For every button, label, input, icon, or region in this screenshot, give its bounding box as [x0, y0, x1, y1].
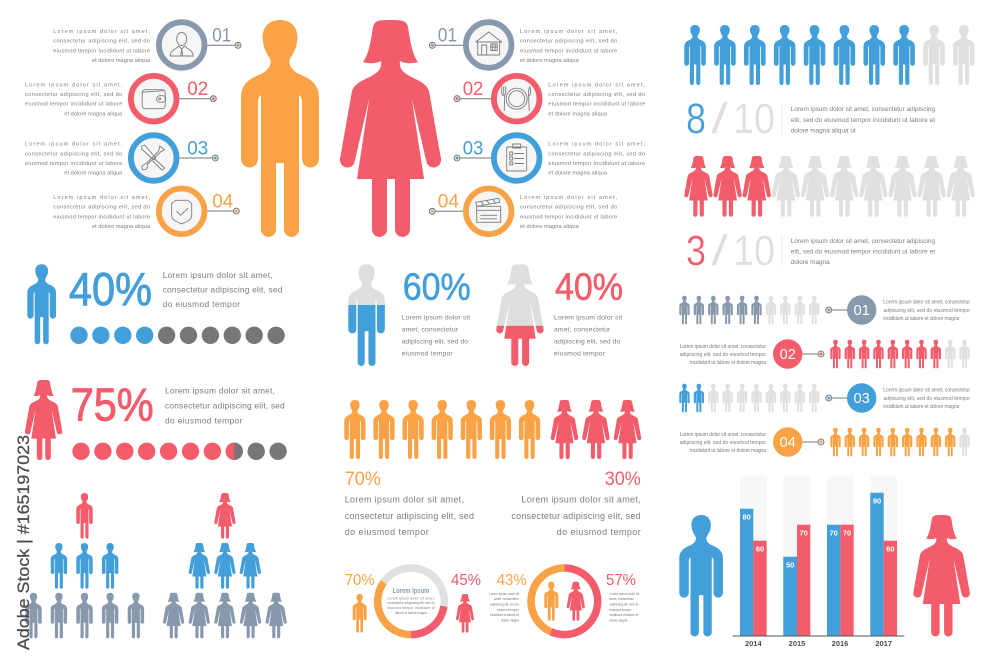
45% label: 45% [451, 572, 481, 589]
row 04: Lorem ipsum dolor sit amet, consectetur [680, 432, 766, 438]
left description: Lorem ipsum dolor sit [489, 592, 519, 596]
red woman [567, 582, 585, 621]
row of ten women [684, 156, 975, 217]
donut center text: Lorem Ipsum [393, 588, 429, 595]
panel: 75% woman [25, 379, 287, 460]
right description: do eiusmod tempor [557, 527, 641, 537]
left description: eiusmod tempor [497, 608, 520, 612]
item 04: clapperboard icon: consectetur adipiscing elit, sed do [520, 205, 617, 211]
description: adipiscing elit, sed do [554, 338, 621, 345]
item 01: house icon [429, 22, 618, 68]
partially filled man [348, 264, 385, 366]
item 02: plate icon [454, 76, 645, 121]
bars 2016: 70 [843, 528, 851, 538]
70% label: 70% [345, 468, 381, 490]
right description [609, 592, 639, 622]
panel: 8 of 10 men [684, 25, 975, 143]
left description: adipiscing elit, sed do [490, 602, 519, 606]
bars 2015: 70 [800, 528, 808, 538]
right description: consectetur adipiscing elit, sed [511, 511, 641, 521]
description text: elit, sed do eiusmod tempor incididunt ut labore et [791, 117, 935, 124]
fraction 8/10: / [711, 95, 728, 143]
row 01: adipiscing elit, sed do eiusmod tempor [883, 308, 970, 314]
item 02: wallet icon: Lorem ipsum dolor sit amet, [25, 82, 123, 88]
bars 2014 [740, 509, 767, 636]
red woman [456, 594, 474, 633]
description: Lorem ipsum dolor sit [554, 314, 622, 321]
57% label: 57% [606, 572, 636, 589]
item 03: clipboard icon [454, 135, 645, 181]
item 01: person icon: eiusmod tempor incididunt ut labore [53, 48, 150, 54]
partially filled woman [496, 264, 544, 366]
item 01: house icon: eiusmod tempor incididunt ut labore [520, 48, 617, 54]
fraction 3/10: 3 [686, 227, 706, 275]
item 02: wallet icon: 02 [187, 78, 208, 100]
donut center text: labore et dolore magna [395, 611, 427, 615]
item 03: tools icon: consectetur adipiscing elit, sed do [25, 151, 122, 157]
description: Lorem ipsum dolor sit amet, [165, 386, 275, 396]
year labels: 2014 [745, 639, 762, 648]
panel: pyramid men [25, 493, 144, 638]
item 03: tools icon: Lorem ipsum dolor sit amet, [25, 142, 123, 148]
row 03: 03 [854, 391, 870, 407]
fraction 8/10 [686, 95, 775, 143]
row 04 [680, 427, 970, 457]
left description [345, 495, 474, 537]
row 04: 04 [780, 435, 796, 451]
item 03: clipboard icon: et dolore magna aliqua [548, 171, 608, 177]
middle blue women [189, 543, 261, 589]
item 04: shield icon: consectetur adipiscing elit, sed do [53, 205, 150, 211]
panel: 3 of 10 women [684, 156, 975, 275]
item 03: tools icon: 03 [187, 137, 208, 159]
description text: dolore magna [791, 259, 830, 266]
item 01: person icon: et dolore magna aliqua [92, 58, 151, 64]
row of ten men [684, 25, 975, 85]
fraction 8/10: 8 [686, 95, 706, 143]
bar backgrounds [740, 477, 897, 636]
description: amet, consectetur [554, 326, 611, 333]
right description [511, 495, 641, 537]
dot scale [72, 443, 287, 460]
orange man [353, 594, 367, 633]
row 03 [679, 383, 970, 413]
left description: consectetur adipiscing elit, sed [345, 511, 474, 521]
description [402, 314, 470, 357]
75% figure: 75% [71, 379, 154, 431]
row 02: Lorem ipsum dolor sit amet, consectetur [680, 344, 766, 350]
item 03: tools icon [25, 135, 218, 181]
bars 2015 [783, 525, 810, 636]
panel: donut 43% and 57% [489, 568, 639, 635]
row 02: incididunt ut labore et dolore magna [690, 360, 766, 366]
donut center text: Lorem ipsum dolor sit amet, [387, 596, 435, 600]
43% label: 43% [497, 572, 527, 589]
row 03: incididunt ut labore et dolore magna [883, 404, 960, 410]
item 02: wallet icon: et dolore magna aliqua [64, 111, 123, 117]
item 03: clipboard icon: consectetur adipiscing elit, sed do [548, 151, 645, 157]
left description: dolore magna [501, 618, 519, 622]
description: do eiusmod tempor [163, 299, 240, 309]
year labels [745, 639, 892, 648]
item 03: clipboard icon: Lorem ipsum dolor sit amet, [548, 142, 645, 148]
item 02: plate icon: eiusmod tempor incididunt ut labore [548, 102, 645, 108]
top red woman [214, 493, 236, 539]
donut center text: eiusmod tempor incididunt ut [387, 606, 435, 610]
right description: dolore magna [609, 618, 627, 622]
bars 2017: 90 [873, 496, 881, 506]
item 04: clapperboard icon: Lorem ipsum dolor sit amet, [520, 195, 618, 201]
item 04: shield icon [53, 188, 239, 234]
top red man [76, 493, 93, 539]
item 04: shield icon: et dolore magna aliqua [92, 224, 151, 230]
description: consectetur adipiscing elit, sed [165, 401, 285, 411]
item 04: clapperboard icon: 04 [438, 190, 459, 212]
item 01: person icon: Lorem ipsum dolor sit amet, [53, 29, 150, 35]
row 04: adipiscing elit, sed do eiusmod tempor [680, 440, 766, 446]
row 04: incididunt ut labore et dolore magna [690, 448, 766, 454]
description text: Lorem ipsum dolor sit amet, consectetur adipiscing [791, 106, 935, 113]
large pink woman figure [340, 20, 441, 237]
row 03: Lorem ipsum dolor sit amet, consectetur [883, 388, 970, 394]
description: adipiscing elit, sed do [402, 338, 468, 345]
bars 2016: 70 [830, 528, 838, 538]
vertical stock credit text: Adobe Stock | #165197023 [14, 435, 33, 650]
large orange man figure [241, 20, 319, 237]
item 04: shield icon: eiusmod tempor incididunt ut labore [53, 214, 150, 220]
three red women [551, 400, 641, 459]
year labels: 2016 [832, 639, 848, 648]
item 02: plate icon: Lorem ipsum dolor sit amet, [548, 82, 645, 88]
item 01: person icon [53, 22, 241, 68]
item 04: clapperboard icon: eiusmod tempor incididunt ut labore [520, 214, 617, 220]
item 04: shield icon: Lorem ipsum dolor sit amet, [53, 195, 150, 201]
panel: 40% man [27, 263, 285, 344]
item 01: person icon: consectetur adipiscing elit, sed do [53, 39, 150, 45]
item 03: clipboard icon: 03 [463, 137, 483, 159]
donut ring [378, 568, 444, 635]
row 01 [679, 295, 970, 325]
panel: four people rows [679, 295, 970, 457]
bottom slate men [25, 593, 144, 638]
panel: 40% woman fill [496, 264, 623, 366]
item 03: tools icon: et dolore magna aliqua [64, 171, 123, 177]
year labels: 2017 [875, 639, 892, 648]
panel: male figure with four items [25, 20, 319, 237]
item 01: house icon: 01 [438, 25, 457, 47]
description text [791, 106, 935, 134]
item 02: plate icon: et dolore magna aliqua [548, 111, 608, 117]
item 01: house icon: consectetur adipiscing elit, sed do [520, 39, 617, 45]
right description: adipiscing elit, sed do [609, 602, 638, 606]
left description: incididunt ut labore et [490, 613, 519, 617]
description: Lorem ipsum dolor sit amet, [163, 270, 273, 280]
bars 2017 [870, 493, 897, 636]
seven orange men [344, 400, 540, 459]
30% label: 30% [605, 468, 641, 490]
bars 2014: 60 [756, 544, 764, 554]
dot scale [70, 327, 285, 344]
description [165, 386, 285, 425]
item 04: clapperboard icon [429, 188, 618, 234]
description: amet, consectetur [402, 326, 459, 333]
item 03: clipboard icon: eiusmod tempor incididunt ut labore [548, 161, 645, 167]
blue man icon [27, 264, 56, 344]
item 02: wallet icon [25, 76, 216, 121]
description: do eiusmod tempor [165, 415, 243, 425]
left description [489, 592, 520, 622]
left description: amet, consectetur [494, 597, 520, 601]
red woman icon [25, 380, 62, 460]
row 01: Lorem ipsum dolor sit amet, consectetur [883, 300, 970, 306]
description text: elit, sed do eiusmod tempor incididunt ut labore et [791, 248, 935, 256]
bars 2015: 50 [786, 560, 794, 570]
panel: bar chart men vs women [679, 477, 970, 648]
donut ring [531, 568, 598, 635]
description: consectetur adipiscing elit, sed [163, 284, 283, 294]
right description: Lorem ipsum dolor sit amet, [521, 495, 641, 505]
panel: female figure with four items [340, 20, 645, 237]
description: Lorem ipsum dolor sit [402, 314, 470, 321]
year labels: 2015 [789, 639, 805, 648]
item 01: person icon: 01 [212, 25, 231, 47]
bars 2016 [827, 525, 854, 636]
item 04: shield icon: 04 [212, 190, 233, 212]
row 02 [680, 339, 970, 369]
fraction 8/10: 10 [733, 95, 775, 143]
item 02: plate icon: consectetur adipiscing elit, sed do [548, 92, 645, 98]
description: eiusmod tempor [402, 350, 453, 357]
row 02: 02 [780, 347, 796, 363]
fraction 3/10 [686, 227, 775, 275]
right description: incididunt ut labore et [609, 613, 638, 617]
middle blue men [51, 543, 118, 589]
fraction 3/10: / [711, 227, 728, 275]
left description: Lorem ipsum dolor sit amet, [345, 495, 464, 505]
40% figure: 40% [555, 266, 623, 308]
40% figure: 40% [69, 263, 152, 315]
item 01: house icon: Lorem ipsum dolor sit amet, [520, 29, 618, 35]
panel: 60% man fill [348, 264, 471, 366]
orange man [544, 582, 558, 621]
blue man [679, 515, 723, 637]
donut center text [387, 588, 435, 615]
right description: eiusmod tempor [609, 608, 632, 612]
row 03: adipiscing elit, sed do eiusmod tempor [883, 396, 970, 402]
fraction 3/10: 10 [733, 227, 775, 275]
bottom slate women [163, 593, 287, 638]
description [554, 314, 622, 357]
right description: Lorem ipsum dolor sit [609, 592, 639, 596]
description text: dolore magna aliqua ut [791, 128, 856, 134]
panel: donut 70% and 45% [345, 568, 481, 635]
item 02: wallet icon: consectetur adipiscing elit, sed do [25, 92, 122, 98]
row 02: adipiscing elit, sed do eiusmod tempor [680, 352, 766, 358]
item 03: tools icon: eiusmod tempor incididunt ut labore [25, 161, 122, 167]
description [163, 270, 283, 309]
item 02: wallet icon: eiusmod tempor incididunt ut labore [25, 102, 122, 108]
item 04: clapperboard icon: et dolore magna aliqua [520, 224, 580, 230]
left description: do eiusmod tempor [345, 527, 429, 537]
panel: 70/30 split [344, 400, 641, 537]
item 02: plate icon: 02 [463, 78, 483, 100]
description text [791, 238, 935, 266]
right description: amet, consectetur [609, 597, 635, 601]
bars 2014: 80 [743, 512, 751, 522]
donut center text: consectetur adipiscing elit, sed do [387, 601, 435, 605]
bars 2017: 60 [886, 544, 895, 554]
60% figure: 60% [403, 266, 471, 308]
description: eiusmod tempor [554, 350, 606, 357]
red woman [913, 515, 970, 637]
panel: pyramid women [163, 493, 287, 638]
row 01: 01 [854, 303, 870, 319]
description text: Lorem ipsum dolor sit amet, consectetur adipiscing [791, 238, 935, 245]
70% label: 70% [345, 572, 375, 589]
row 01: incididunt ut labore et dolore magna [883, 316, 960, 322]
item 01: house icon: et dolore magna aliqua [520, 58, 580, 64]
